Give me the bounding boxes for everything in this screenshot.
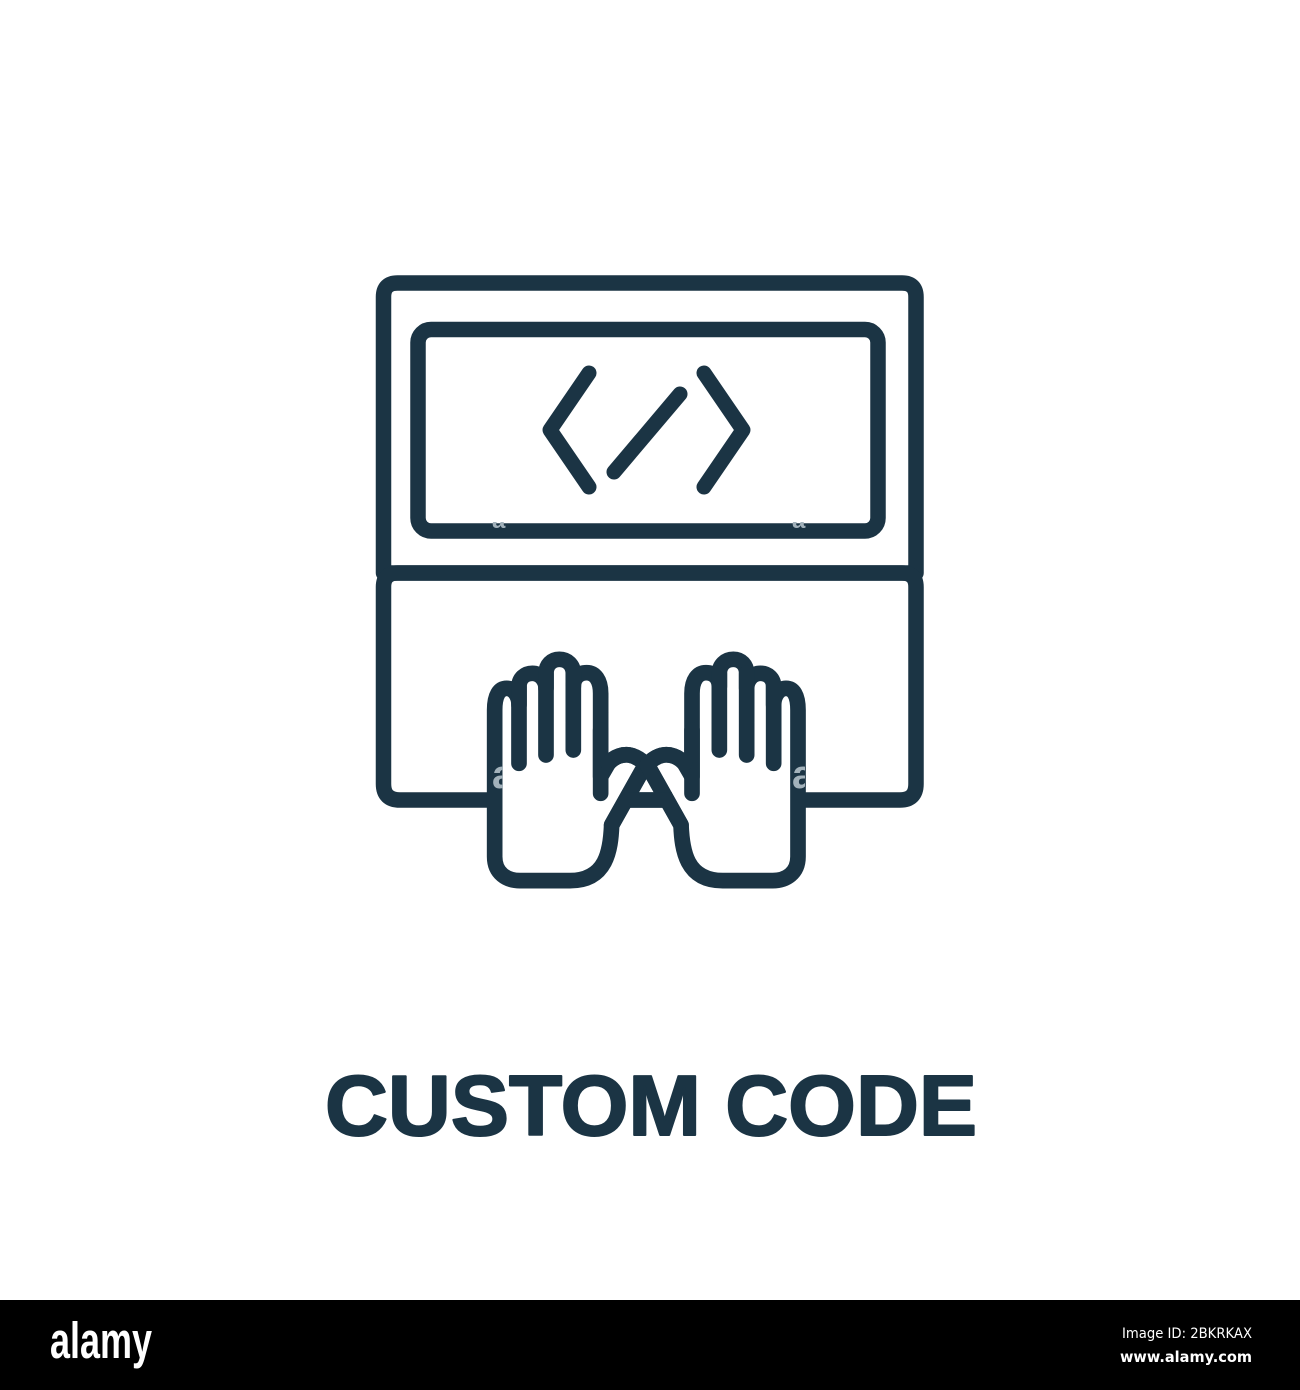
watermark fragments xyxy=(492,522,806,788)
watermark fragments: a xyxy=(792,753,815,797)
icon: right hand xyxy=(647,659,798,881)
laptop screen lid xyxy=(384,283,916,573)
footer url: www.alamy.com xyxy=(1120,1348,1252,1366)
footer logo: alamy xyxy=(50,1312,152,1369)
watermark fragments: a xyxy=(792,507,806,534)
watermark fragments: a xyxy=(492,507,506,534)
title: CUSTOM CODE: CUSTOM CODE xyxy=(325,1059,977,1154)
icon: laptop with code and typing hands xyxy=(384,283,916,881)
keyboard base xyxy=(384,573,916,800)
icon: code brackets xyxy=(550,373,743,487)
footer bar xyxy=(0,1300,1300,1390)
keyboard centre bar xyxy=(628,792,672,808)
icon: left hand xyxy=(495,659,645,881)
watermark fragments: a xyxy=(492,753,515,797)
screen panel xyxy=(418,330,878,531)
footer image id: Image ID: 2BKRKAX xyxy=(1122,1326,1252,1342)
